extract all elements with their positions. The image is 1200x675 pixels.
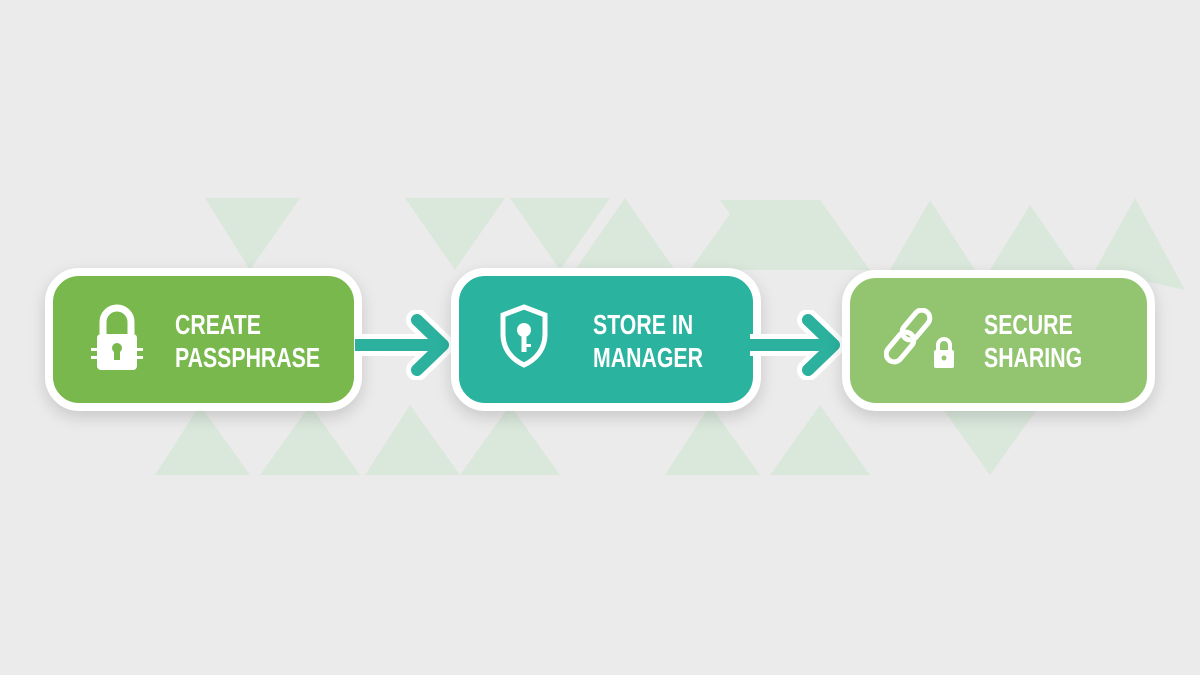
label: PASSPHRASE: [175, 342, 320, 373]
icon: chain and lock: [884, 308, 954, 368]
step 1: create passphrase: [45, 268, 362, 411]
step 3: secure sharing: [842, 270, 1155, 411]
arrow 2: [750, 310, 842, 380]
label: MANAGER: [593, 342, 703, 373]
label: SHARING: [984, 342, 1082, 373]
label: SECURE: [984, 309, 1073, 340]
label: STORE IN: [593, 309, 693, 340]
label: [984, 309, 1082, 373]
icon: shield key: [500, 304, 548, 368]
label: CREATE: [175, 309, 261, 340]
label: [175, 309, 320, 373]
label: [593, 309, 703, 373]
arrow 1: [355, 310, 451, 380]
step 2: store in manager: [451, 268, 761, 411]
icon: padlock: [91, 304, 143, 370]
